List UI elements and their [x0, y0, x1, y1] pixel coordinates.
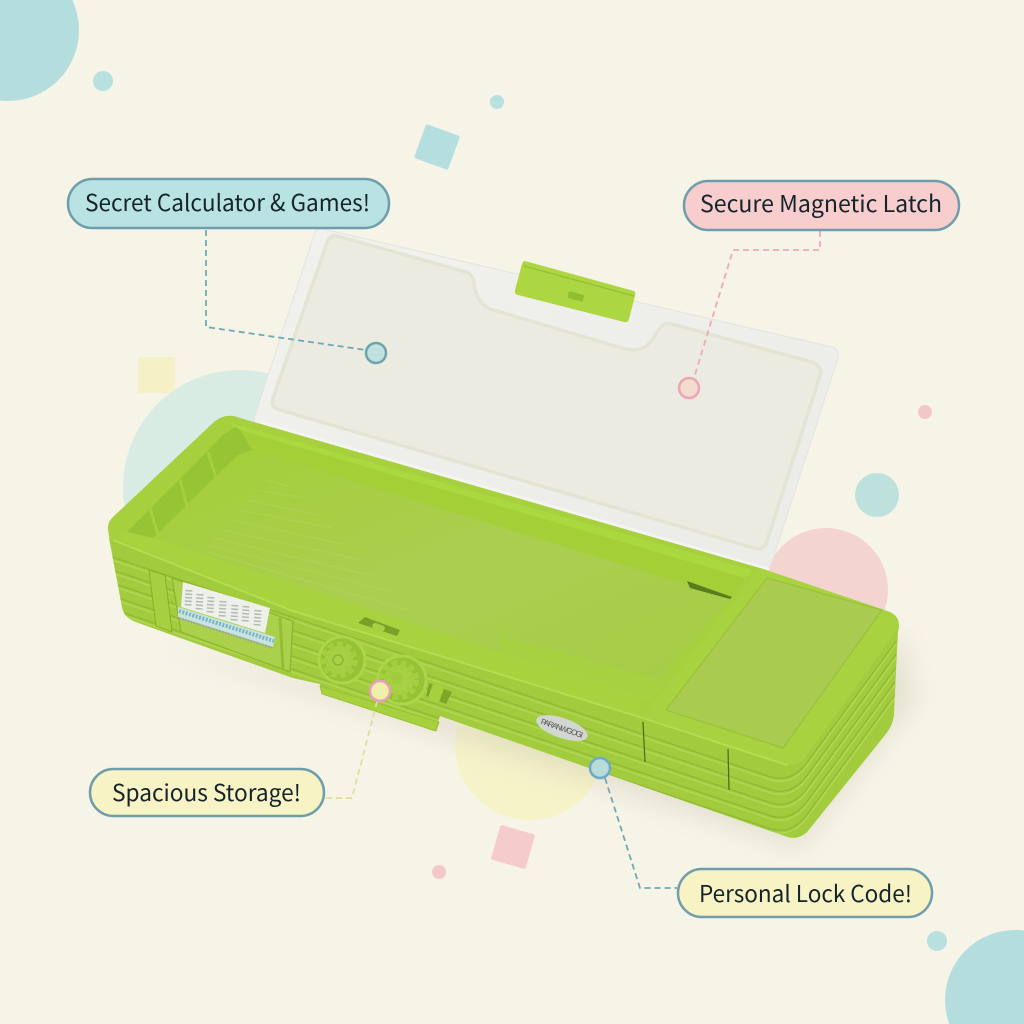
calculator window [172, 578, 293, 672]
back slot [687, 581, 732, 599]
callout: magnetic latch [679, 181, 959, 398]
tray floor [153, 450, 730, 695]
callout: personal lock code: Personal Lock Code! [699, 875, 912, 909]
drop shadow [160, 630, 915, 848]
silver badge [533, 710, 591, 746]
callout: secret calculator [68, 179, 389, 363]
case silhouette [108, 416, 899, 838]
callout: spacious storage: Spacious Storage! [112, 774, 301, 808]
front top highlight [113, 540, 896, 765]
callout: personal lock code [590, 758, 932, 917]
lid outer shell [254, 229, 838, 570]
raised floor ridge [500, 637, 667, 702]
top slot [358, 617, 400, 636]
lock pin [426, 682, 452, 704]
right end block [642, 568, 898, 764]
green pencil case body [100, 416, 900, 838]
front ledge [115, 532, 640, 716]
lower slider tab [320, 686, 439, 731]
callout: spacious storage [90, 681, 390, 816]
callout: secret calculator: Secret Calculator & Games! [85, 184, 370, 218]
latch tab [515, 261, 635, 322]
hinge strip [258, 420, 770, 578]
back rim [228, 422, 752, 580]
open transparent lid [254, 229, 838, 578]
rotary dial left [319, 637, 365, 683]
silver badge: PARANWGOGI [540, 717, 584, 740]
left inner wall [127, 424, 254, 538]
callout: magnetic latch: Secure Magnetic Latch [700, 185, 942, 219]
lid inner panel [272, 236, 821, 549]
rotary dial right [378, 656, 426, 704]
front ribbed wall [100, 538, 900, 838]
left wall ribs [150, 452, 216, 535]
back inner wall [240, 430, 745, 600]
end block clasp [643, 722, 729, 790]
floor embossed pattern [207, 480, 408, 610]
left latch detail [149, 570, 172, 632]
